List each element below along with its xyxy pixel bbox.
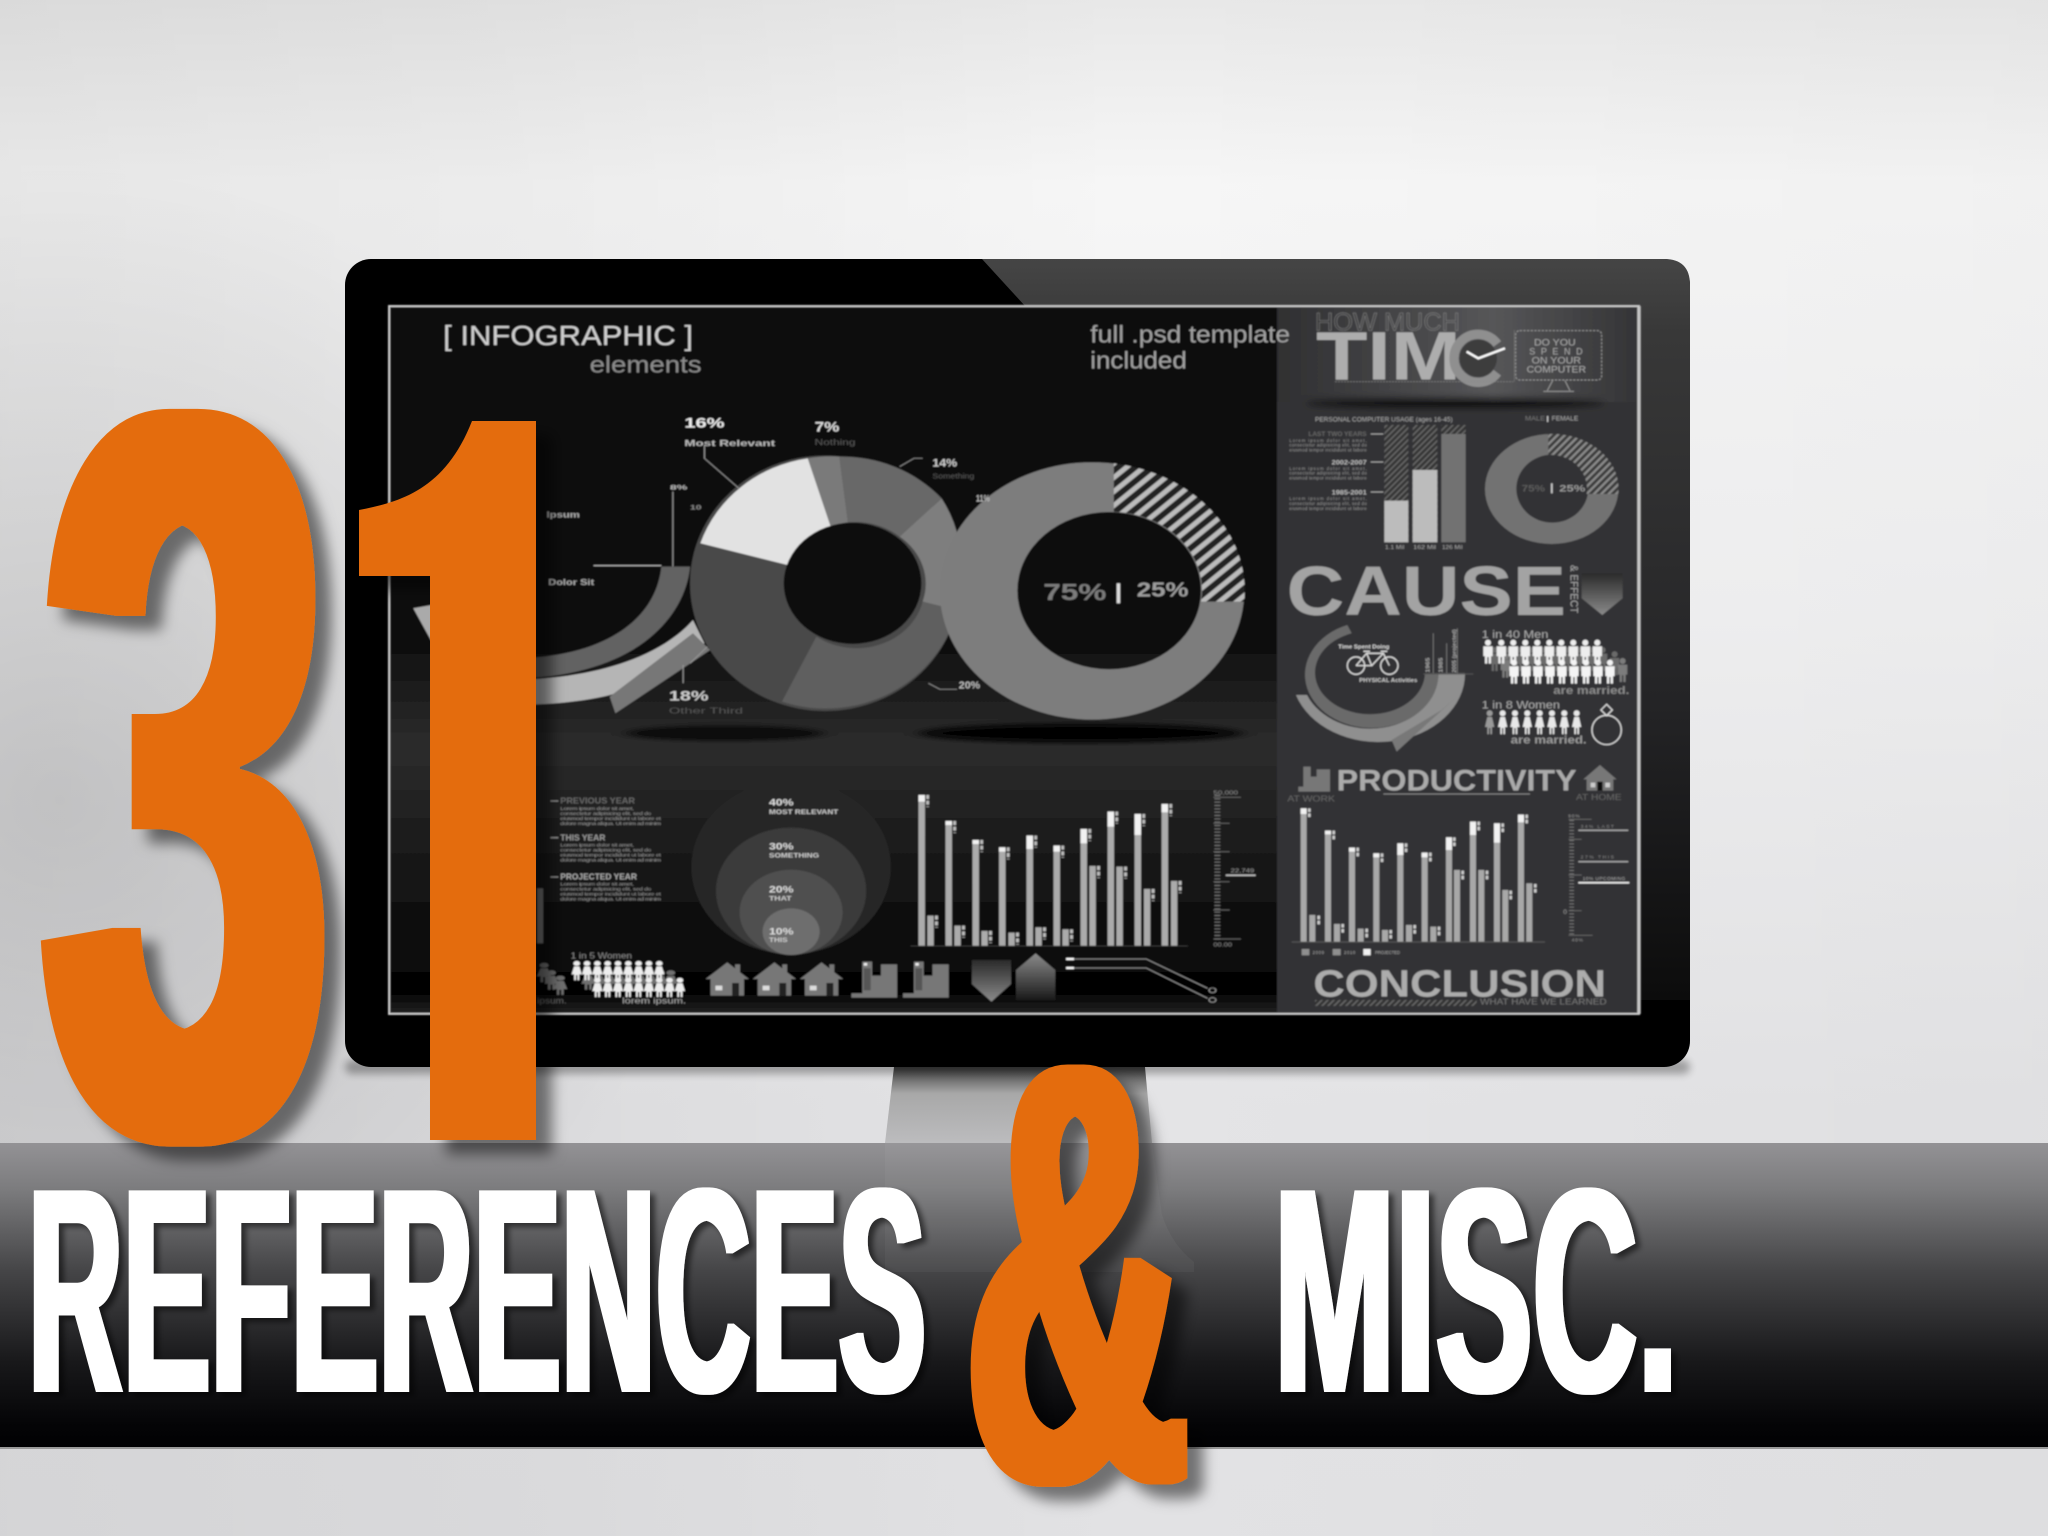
- heading: conclusion: CONCLUSION: [1313, 963, 1606, 1006]
- heading: how much time: [1315, 309, 1514, 394]
- nested ellipse chart: 40%: [769, 799, 794, 808]
- scale: 50,000: [1213, 790, 1238, 796]
- pictogram: men married: [1482, 629, 1629, 697]
- panel: lower left charts: dolore magna aliqua. Ut enim ad minim: [560, 858, 661, 863]
- icons: houses and buildings: [706, 962, 949, 998]
- nested ellipse chart: MOST RELEVANT: [769, 808, 838, 816]
- bar chart: [910, 795, 1188, 946]
- bar chart: computer usage: eiusmod tempor incididunt ut labore: [1289, 476, 1367, 481]
- panel: donut charts: 75%: [1043, 579, 1106, 605]
- heading: productivity: AT WORK: [1287, 793, 1336, 803]
- panel: lower left charts: Lorem ipsum dolor sit amet,: [560, 882, 635, 887]
- bar chart: computer usage: LAST TWO YEARS: [1308, 431, 1367, 438]
- ring chart: physical activities: [1296, 625, 1473, 752]
- bar chart: computer usage: 2002-2007: [1332, 459, 1367, 466]
- monitor stand: [885, 1067, 1152, 1143]
- donut chart: male female: MALE: [1525, 416, 1545, 423]
- icons: people: lorem ipsum.: [622, 997, 686, 1006]
- nested ellipse chart: 20%: [769, 885, 794, 895]
- bar chart: computer usage: 162 Mil: [1413, 545, 1436, 551]
- callout: do you spend on your computer: ON YOUR: [1532, 355, 1582, 365]
- panel: lower left charts: PROJECTED YEAR: [560, 873, 637, 882]
- heading: how much time: TIM: [1316, 318, 1461, 394]
- heading: infographic elements: [ INFOGRAPHIC ]: [443, 321, 693, 351]
- bar chart: computer usage: eiusmod tempor incididunt ut labore: [1289, 506, 1367, 511]
- panel: lower left charts: [537, 781, 1256, 1006]
- panel: lower left charts: PREVIOUS YEAR: [560, 797, 636, 806]
- nested ellipse chart: 10%: [769, 927, 794, 937]
- bar chart: computer usage: PERSONAL COMPUTER USAGE (ages 16-45): [1315, 417, 1453, 424]
- scale: 00.00: [1213, 942, 1232, 948]
- heading: cause and effect: CAUSE: [1287, 552, 1566, 630]
- donut chart: male female: FEMALE: [1552, 416, 1578, 423]
- pictogram: men married: are married.: [1553, 685, 1629, 697]
- bar chart: computer usage: consectetur adipisicing elit, sed do: [1289, 471, 1367, 476]
- scale: productivity: 34% LAST: [1581, 824, 1614, 830]
- panel: lower left charts: consectetur adipisicing elit, sed do: [560, 812, 651, 817]
- panel: lower left charts: Lorem ipsum dolor sit amet,: [560, 807, 635, 812]
- scale: productivity: 0: [1563, 909, 1567, 916]
- panel: donut charts: 8%: [670, 484, 688, 491]
- bar chart: computer usage: [1289, 417, 1466, 551]
- callout: do you spend on your computer: S P E N D: [1529, 346, 1583, 356]
- panel: lower left charts: consectetur adipisicing elit, sed do: [560, 848, 651, 853]
- heading: productivity: PRODUCTIVITY: [1337, 765, 1577, 798]
- pictogram: men married: 1 in 40 Men: [1482, 629, 1548, 641]
- connector lines: [1066, 959, 1216, 1002]
- nested ellipse chart: [691, 781, 891, 955]
- panel: donut charts: Other Third: [669, 705, 743, 715]
- panel: donut charts: 18%: [669, 689, 708, 704]
- panel: lower left charts: consectetur adipisicing elit, sed do: [560, 887, 651, 892]
- ring chart: physical activities: 2005 (projected): [1452, 629, 1458, 673]
- title band: [0, 1143, 2048, 1449]
- nested ellipse chart: THIS: [769, 936, 788, 944]
- bar chart: computer usage: eiusmod tempor incididunt ut labore: [1289, 447, 1367, 452]
- scale: productivity: [1563, 813, 1629, 943]
- donut chart: male female: 75%: [1522, 484, 1545, 494]
- callout: do you spend on your computer: [1516, 331, 1602, 391]
- screen: [389, 306, 1639, 1014]
- pictogram: women married: are married.: [1511, 734, 1587, 746]
- donut chart: male female: [1485, 416, 1619, 544]
- heading: how much time: HOW MUCH: [1315, 309, 1460, 337]
- number 31: 3: [43, 195, 329, 1356]
- screen frame: [389, 306, 1639, 1014]
- heading: infographic elements: included: [1090, 347, 1187, 374]
- arrows: [972, 953, 1055, 1002]
- monitor: [345, 259, 1690, 1074]
- heading: conclusion: WHAT HAVE WE LEARNED: [1480, 998, 1607, 1007]
- icons: people: 1 in 5 Women: [571, 952, 632, 961]
- pictogram: women married: [1482, 700, 1621, 746]
- panel: donut charts: Dolor Sit: [548, 577, 594, 587]
- ring chart: physical activities: 1965: [1425, 658, 1431, 673]
- nested ellipse chart: 30%: [769, 842, 794, 852]
- text: REFERENCES: [28, 1128, 926, 1455]
- ring chart: physical activities: 1985: [1439, 658, 1445, 673]
- bar chart: productivity: [1292, 808, 1545, 955]
- panel: donut charts: 14%: [932, 457, 957, 469]
- panel: donut charts: 7%: [815, 420, 839, 435]
- bar chart: productivity: PROJECTED: [1375, 950, 1400, 955]
- heading: infographic elements: [443, 321, 1290, 378]
- number 31: [40, 408, 562, 1168]
- bar chart: computer usage: consectetur adipisicing elit, sed do: [1289, 501, 1367, 506]
- panel: donut charts: Most Relevant: [684, 438, 775, 448]
- bar chart: computer usage: Lorem ipsum dolor sit amet,: [1289, 466, 1367, 471]
- nested ellipse chart: THAT: [769, 895, 792, 902]
- panel: donut charts: Nothing: [815, 439, 855, 447]
- bar chart: productivity: 2010: [1344, 950, 1356, 955]
- panel: donut charts: 10: [690, 504, 702, 511]
- heading: infographic elements: elements: [590, 351, 702, 378]
- panel: lower left charts: eiusmod tempor incididunt ut labore et: [560, 892, 662, 897]
- panel: lower left charts: Lorem ipsum dolor sit amet,: [560, 843, 635, 848]
- scale: [1213, 790, 1256, 948]
- callout: do you spend on your computer: COMPUTER: [1527, 364, 1587, 374]
- scale: productivity: 40%: [1572, 937, 1584, 943]
- heading: productivity: [1287, 765, 1622, 803]
- bar chart: computer usage: Lorem ipsum dolor sit amet,: [1289, 496, 1367, 501]
- icons: people: ipsum.: [537, 997, 567, 1006]
- panel: donut charts: 11%: [976, 493, 990, 504]
- bar chart: productivity: 2009: [1313, 950, 1325, 955]
- pictogram: women married: 1 in 8 Women: [1482, 700, 1560, 712]
- panel: donut charts: Ipsum: [547, 510, 580, 519]
- ring chart: physical activities: PHYSICAL Activities: [1359, 678, 1417, 684]
- panel: lower left charts: eiusmod tempor incididunt ut labore et: [560, 853, 662, 858]
- panel: lower left charts: dolore magna aliqua. Ut enim ad minim: [560, 822, 661, 827]
- panel: donut charts: 25%: [1137, 579, 1189, 602]
- callout: do you spend on your computer: DO YOU: [1534, 337, 1576, 347]
- icons: people: [537, 952, 686, 1006]
- bar chart: computer usage: 126 Mil: [1442, 545, 1463, 551]
- text: 1: [337, 189, 621, 1363]
- bar chart: computer usage: consectetur adipisicing elit, sed do: [1289, 443, 1367, 448]
- ring chart: physical activities: Time Spent Doing: [1338, 645, 1390, 651]
- donut chart: male female: 25%: [1559, 484, 1585, 494]
- bar chart: computer usage: 1.1 Mil: [1385, 545, 1404, 551]
- panel: donut charts: [413, 415, 1245, 743]
- bar chart: computer usage: Lorem ipsum dolor sit amet,: [1289, 438, 1367, 443]
- panel: right column: [1277, 307, 1637, 1013]
- nested ellipse chart: SOMETHING: [769, 852, 819, 859]
- heading: infographic elements: full .psd template: [1090, 321, 1290, 348]
- panel: donut charts: 20%: [959, 679, 980, 690]
- bar chart: computer usage: 1985-2001: [1332, 490, 1367, 497]
- scale: productivity: 10% UPCOMING: [1583, 876, 1625, 882]
- panel: lower left charts: dolore magna aliqua. Ut enim ad minim: [560, 897, 661, 902]
- panel: lower left charts: eiusmod tempor incididunt ut labore et: [560, 817, 662, 822]
- scale: 22,749: [1231, 868, 1254, 874]
- heading: cause and effect: & EFFECT: [1568, 565, 1580, 614]
- scale: productivity: 27% THIS: [1581, 855, 1615, 861]
- icon: ring: [1592, 704, 1621, 745]
- panel: lower left charts: THIS YEAR: [560, 834, 606, 843]
- panel: donut charts: 16%: [684, 415, 725, 431]
- heading: productivity: AT HOME: [1576, 792, 1622, 802]
- scale: productivity: 90%: [1568, 813, 1580, 819]
- panel: donut charts: Something: [932, 473, 975, 480]
